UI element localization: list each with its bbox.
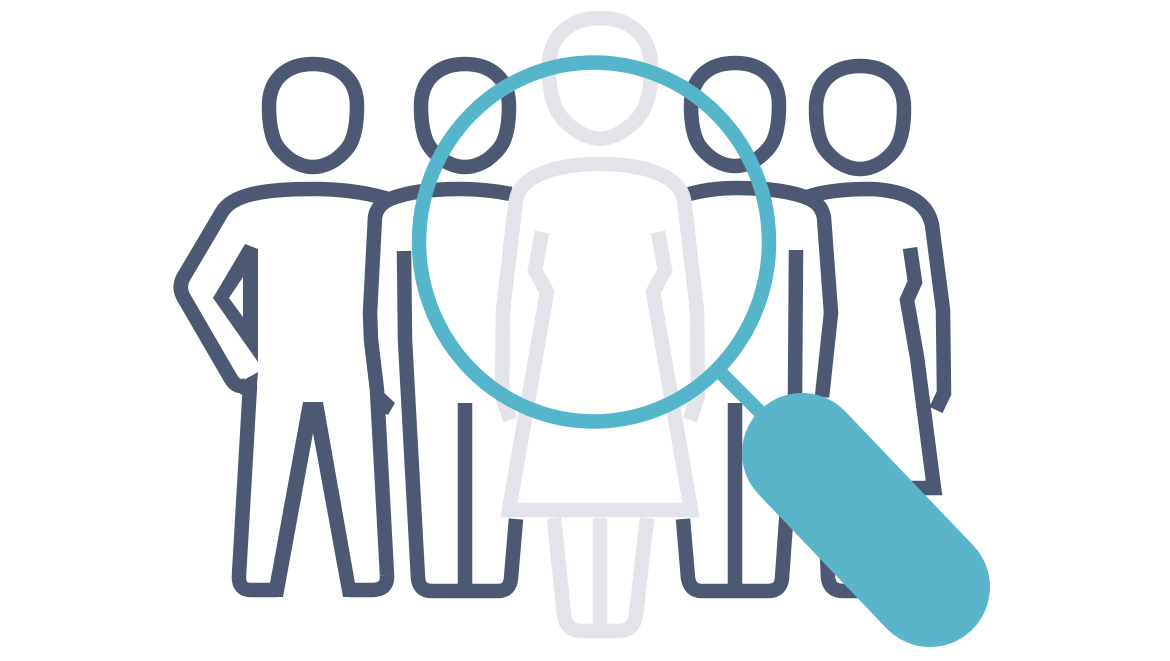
person 3: pale centre figure in dress	[502, 18, 698, 631]
person 1: far left figure	[181, 64, 388, 597]
person 4: second figure from right	[683, 63, 831, 591]
magnifying glass	[419, 62, 930, 587]
person 5: far right figure	[807, 66, 944, 591]
person 2: second figure from left	[370, 64, 516, 591]
lens ring	[419, 62, 769, 422]
handle grip	[802, 453, 930, 587]
handle neck	[722, 374, 762, 414]
